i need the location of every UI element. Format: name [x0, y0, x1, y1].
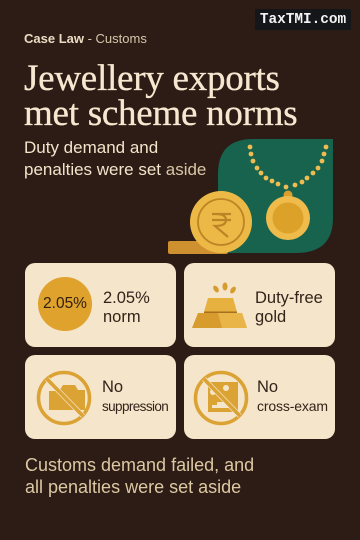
- card label: 2.05%: [103, 289, 150, 307]
- card: 2.05% norm: [25, 263, 176, 347]
- card label: No: [102, 378, 123, 396]
- gold bar: [168, 241, 228, 254]
- necklace beads: [248, 145, 328, 189]
- watermark: TaxTMI.com: [260, 12, 346, 28]
- card label: Duty-free: [255, 289, 323, 307]
- card label: suppression: [102, 399, 168, 414]
- title: met scheme norms: [24, 93, 297, 134]
- card label: [103, 289, 150, 326]
- green panel: [218, 139, 333, 253]
- title: [24, 58, 297, 134]
- card: duty-free gold: [184, 263, 335, 347]
- card: no cross-exam: [184, 355, 335, 439]
- card label: [102, 378, 168, 414]
- card: no suppression: [25, 355, 176, 439]
- rupee coin: [190, 191, 252, 253]
- badge: [38, 277, 92, 331]
- title: Jewellery exports: [24, 58, 280, 99]
- conclusion text: Customs demand failed, and: [25, 455, 254, 475]
- card label: cross-exam: [257, 398, 328, 414]
- conclusion text: [25, 455, 254, 497]
- card label: gold: [255, 308, 286, 326]
- subtitle: Duty demand and: [24, 138, 158, 157]
- card label: [255, 289, 323, 326]
- subtitle: [24, 138, 206, 179]
- icon: prohibited document: [194, 370, 248, 426]
- subtitle: penalties were set aside: [24, 160, 206, 179]
- icon: prohibited folder: [36, 370, 92, 426]
- pendant: [266, 190, 310, 240]
- category label: Case Law - Customs: [24, 31, 147, 46]
- conclusion text: all penalties were set aside: [25, 477, 241, 497]
- watermark: [255, 9, 351, 30]
- illustration: jewellery and coin: [168, 139, 333, 254]
- icon: gold bars: [192, 282, 247, 328]
- badge: 2.05%: [43, 295, 87, 312]
- card label: norm: [103, 308, 141, 326]
- card label: No: [257, 378, 278, 396]
- card label: [257, 378, 328, 414]
